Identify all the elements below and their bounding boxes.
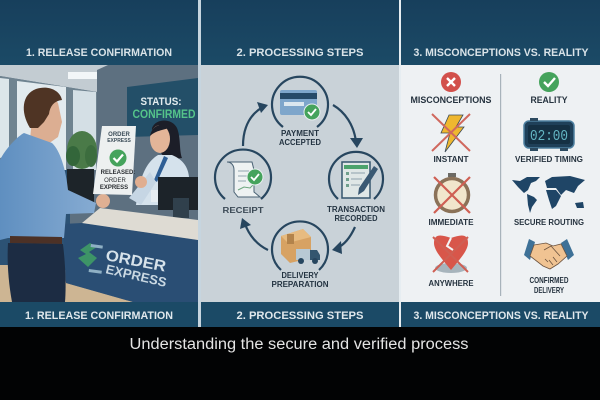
panel: processing steps [201,0,399,327]
released document: EXPRESS [107,138,131,144]
step: transaction recorded [327,162,385,223]
status screen: CONFIRMED [132,109,196,121]
icon: handshake [524,239,574,269]
icon: crossed stopwatch [434,173,470,213]
reception desk [63,208,198,302]
step: transaction recorded: RECORDED [334,213,378,223]
bottom label bar [0,302,198,327]
reality column: VERIFIED TIMING [515,154,583,164]
logo: order express: ORDER [104,247,167,276]
reality column: CONFIRMED [530,275,568,285]
top header band [201,0,399,65]
icon: box and truck [281,229,320,264]
customer [0,88,110,302]
arrow: to receipt [240,218,268,250]
panel heading: 1. RELEASE CONFIRMATION [26,47,172,59]
arrow: to delivery [332,227,355,254]
bottom label: 2. PROCESSING STEPS [236,310,364,322]
bottom label: 1. RELEASE CONFIRMATION [25,310,173,322]
bottom label bar [201,302,399,327]
released document: ORDER [104,178,126,184]
top header band [401,0,600,65]
released document: EXPRESS [100,185,128,191]
logo: order express [78,243,168,290]
icon: digital clock [524,118,574,151]
reality column: REALITY [530,94,568,105]
panel heading: 2. PROCESSING STEPS [236,47,364,59]
top header band [0,0,198,65]
process cycle diagram [215,77,383,270]
icon: red x [441,72,461,92]
step: receipt: RECEIPT [222,205,264,215]
released document: RELEASED: [101,170,135,176]
arrow: to transaction [333,105,363,148]
bottom label bar [401,302,600,327]
step: transaction recorded: TRANSACTION [327,204,385,214]
misconceptions column: IMMEDIATE [428,217,474,227]
step: payment accepted [279,90,321,147]
step: payment accepted: PAYMENT [281,128,320,138]
icon: ledger and pen [342,162,378,198]
step: delivery preparation: PREPARATION [272,279,328,289]
icon: crossed lightning [432,114,470,152]
icon: check [110,150,126,166]
step: payment accepted: ACCEPTED [279,137,321,147]
panel heading: 3. MISCONCEPTIONS VS. REALITY [414,47,589,59]
reality column: DELIVERY [534,285,564,295]
ring arcs [272,77,328,127]
column background [401,65,600,302]
status screen: STATUS: [140,96,182,108]
misconceptions column: MISCONCEPTIONS [410,94,492,105]
floor [0,265,133,302]
arrow: to payment [243,102,268,146]
panel: misconceptions vs reality [401,0,600,327]
logo: order express: EXPRESS [104,261,168,290]
monitors and desk items [67,169,198,218]
icon: receipt scroll [227,162,263,197]
icon: world map [512,176,585,213]
misconceptions column: ANYWHERE [428,278,474,288]
receptionist [129,120,190,205]
released document: ORDER [108,132,130,138]
bottom label: 3. MISCONCEPTIONS VS. REALITY [414,310,589,322]
misconceptions column [410,72,492,288]
misconceptions column: INSTANT [434,154,469,164]
office scene [0,65,198,302]
plant [66,131,97,169]
caption: Understanding the secure and verified process [130,336,469,353]
step: delivery preparation: DELIVERY [282,270,319,280]
icon: green check [539,72,559,92]
status screen [127,78,198,137]
step: delivery preparation [272,229,328,289]
reality column [512,72,585,295]
icon: crossed broken pin [433,236,468,273]
icon: credit card [280,90,320,120]
column background [201,65,399,302]
step: receipt [222,162,264,215]
icon: digital clock: 02:00 [530,128,568,145]
released document [93,126,136,195]
reality column: SECURE ROUTING [514,217,584,227]
panel: release confirmation [0,0,198,327]
